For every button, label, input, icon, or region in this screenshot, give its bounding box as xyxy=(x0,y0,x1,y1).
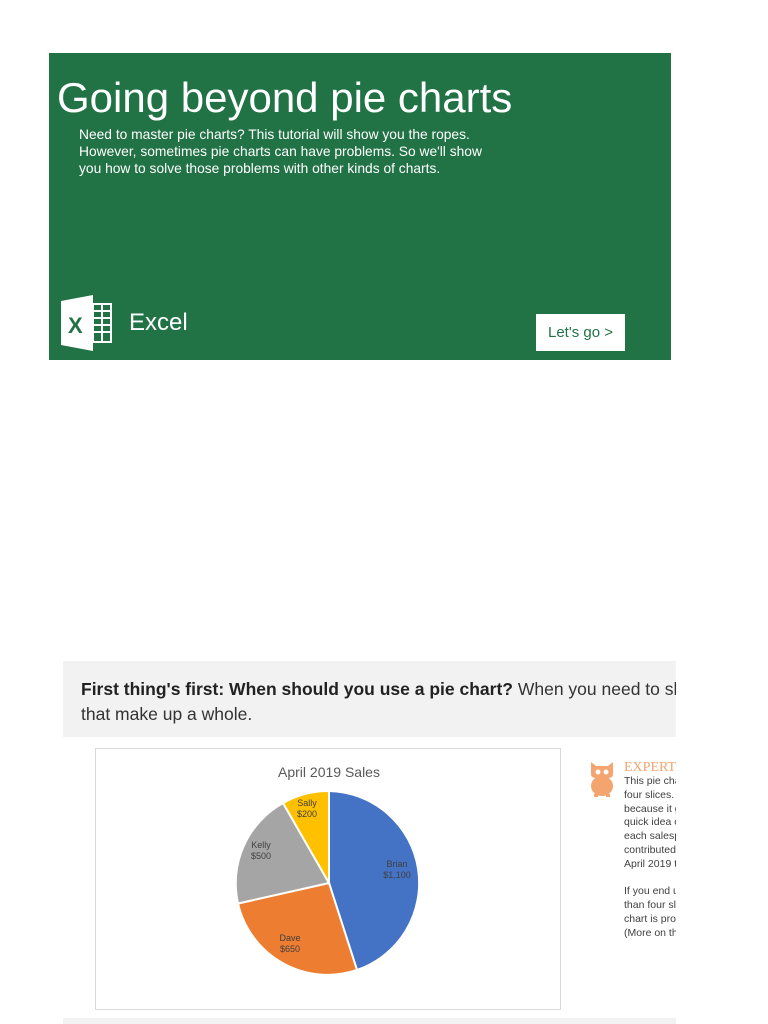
pie chart: Sally xyxy=(297,798,317,808)
text block: intro: However, sometimes pie charts can have problems. So we'll show xyxy=(79,144,482,159)
title: Going beyond pie charts xyxy=(57,74,512,121)
pie chart: Brian xyxy=(386,859,408,869)
text block: intro: Need to master pie charts? This tutorial will show you the ropes. xyxy=(79,127,470,142)
panel: pie chart xyxy=(95,748,561,1010)
tip text xyxy=(624,775,676,939)
panel: expert tip xyxy=(591,760,676,939)
panel: intro question band xyxy=(63,661,676,737)
pie chart: $500 xyxy=(251,851,271,861)
pie chart: $1,100 xyxy=(383,870,411,880)
button: let's go: Let's go > xyxy=(548,324,613,341)
chart title: April 2019 Sales xyxy=(278,764,380,780)
icon: excel logo: X xyxy=(68,313,83,338)
pie chart: $200 xyxy=(297,809,317,819)
panel: next band xyxy=(63,1018,676,1024)
text block: question xyxy=(81,679,676,724)
pie chart: Dave xyxy=(279,933,301,943)
logo text: Excel xyxy=(129,309,188,336)
panel: hero banner xyxy=(49,53,671,360)
text block: intro xyxy=(79,127,482,176)
button: let's go xyxy=(536,314,625,351)
icon: owl xyxy=(591,762,613,797)
text block: question: that make up a whole. xyxy=(81,704,252,724)
pie chart: $650 xyxy=(280,944,300,954)
text block: intro: you how to solve those problems with other kinds of charts. xyxy=(79,161,440,176)
icon: excel logo xyxy=(61,295,112,351)
pie chart: Kelly xyxy=(251,840,271,850)
